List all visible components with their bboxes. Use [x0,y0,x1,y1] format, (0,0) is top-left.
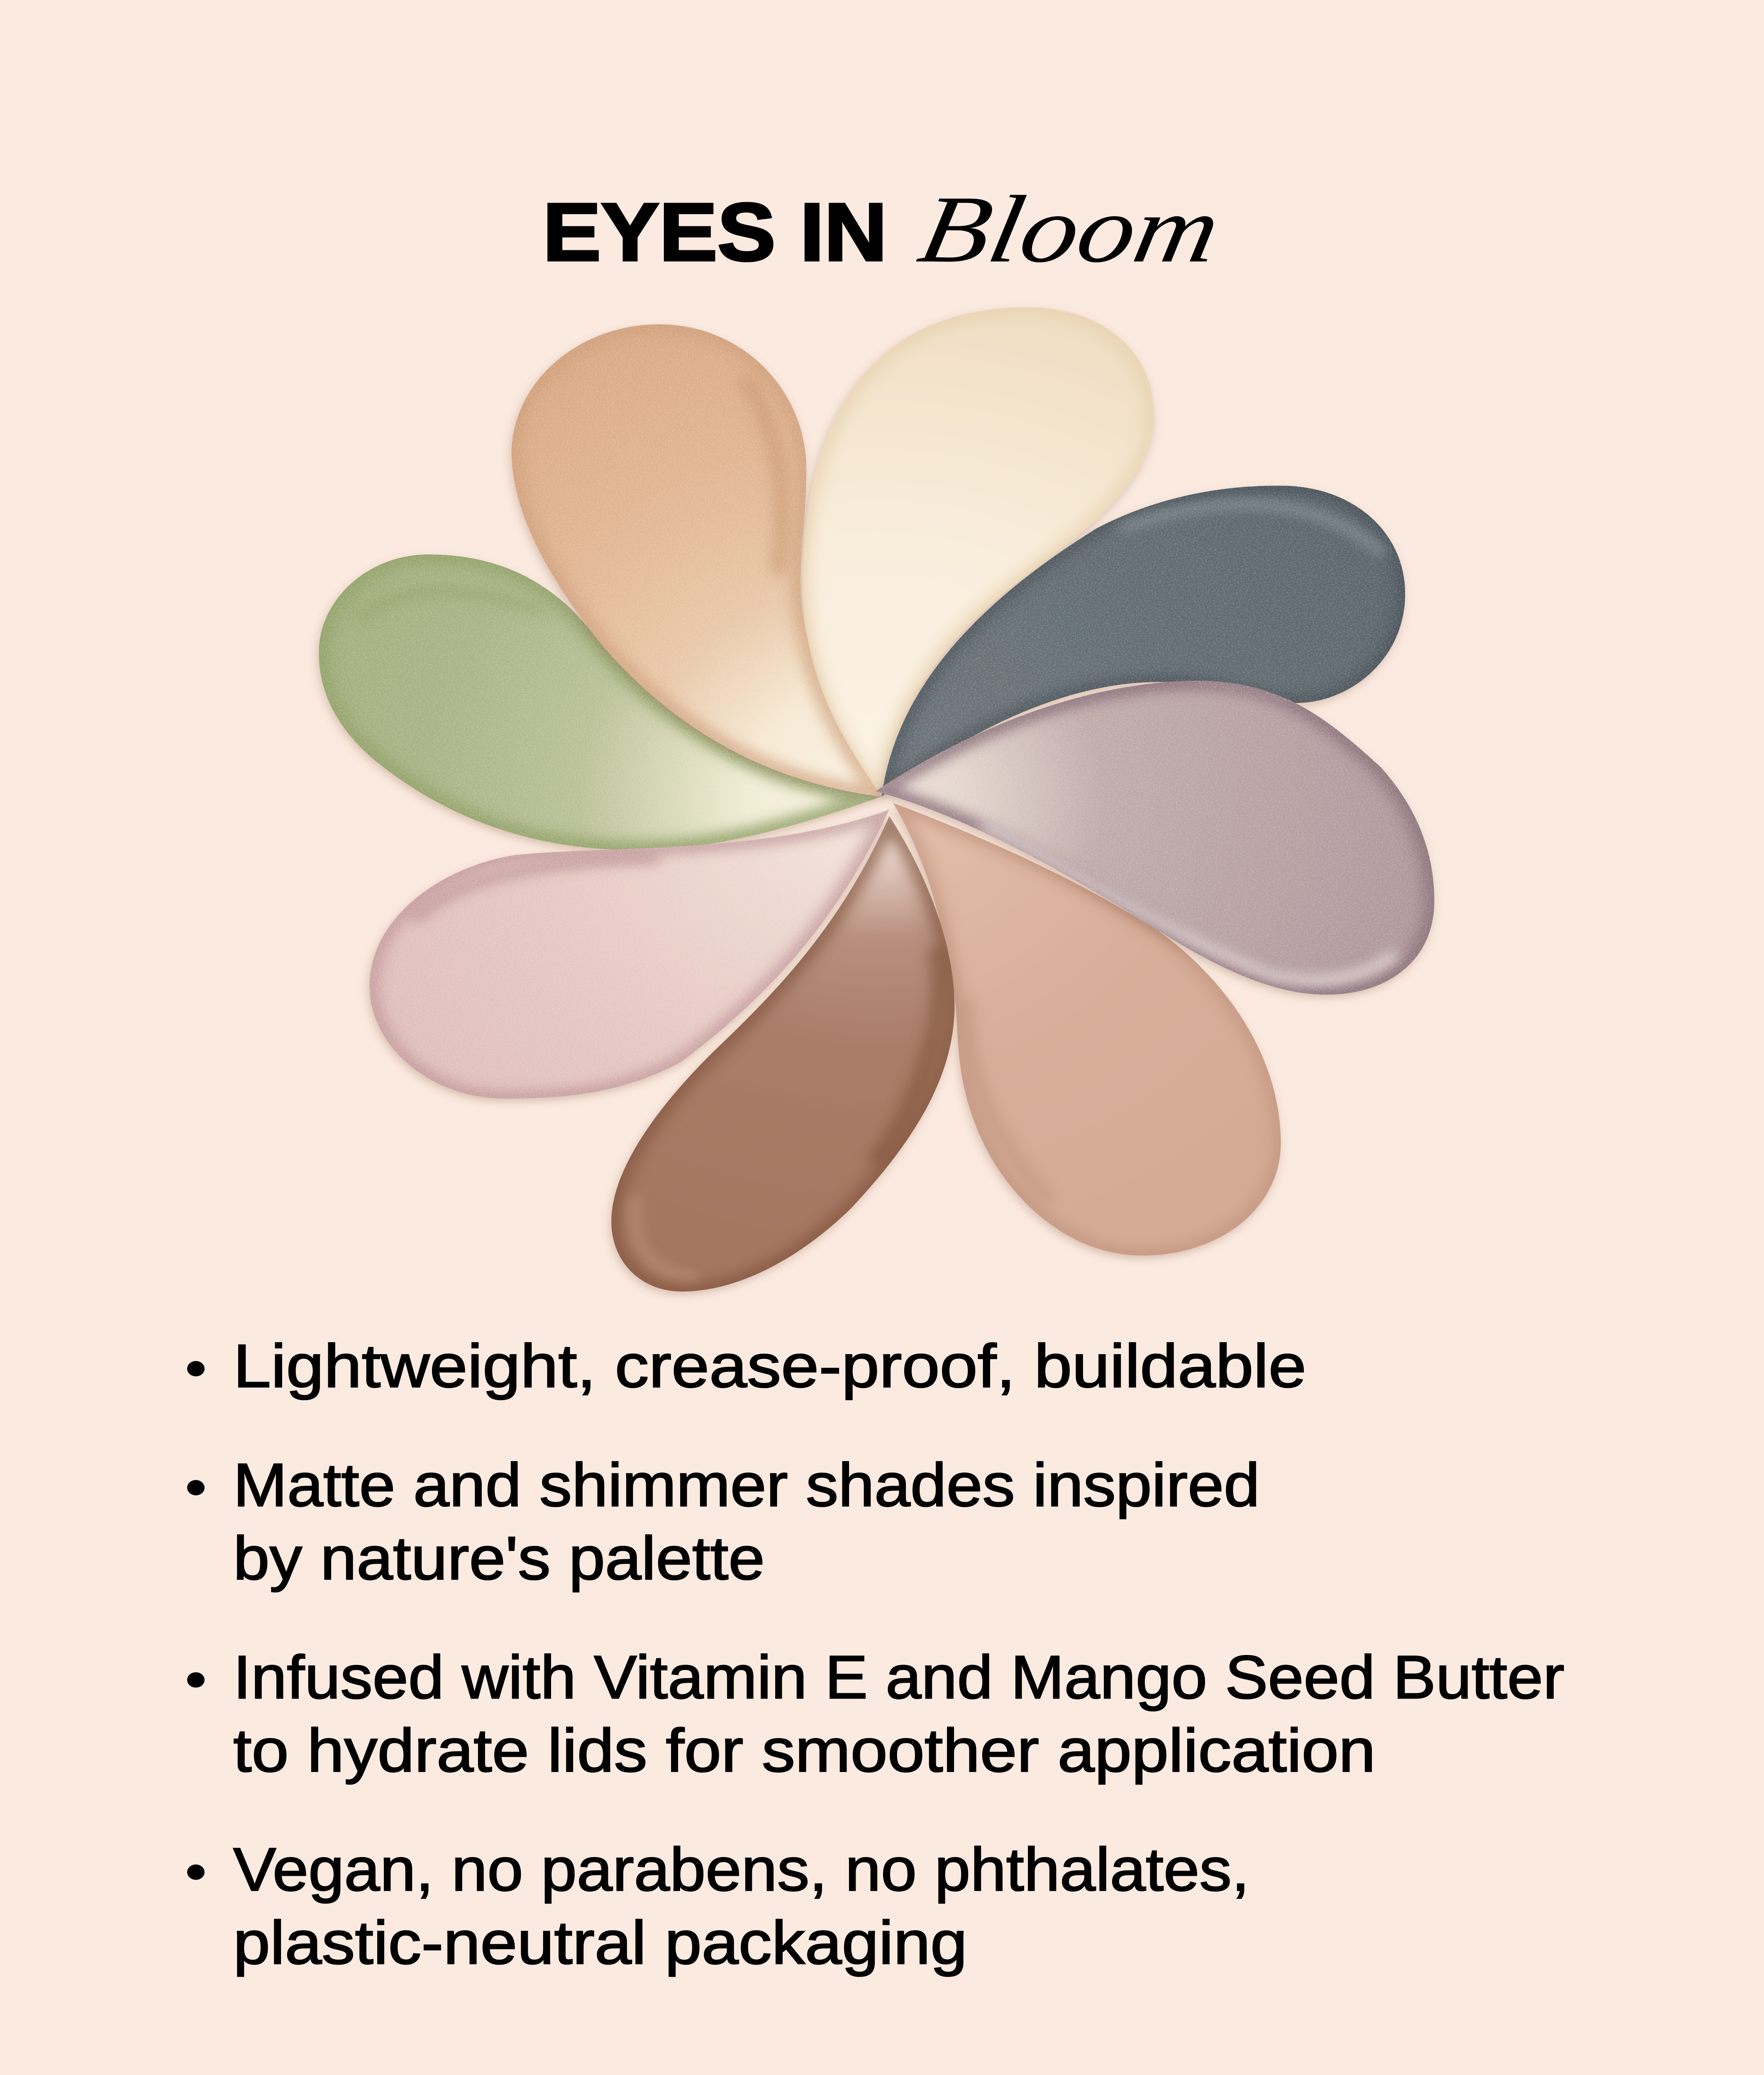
title: eyes in: EYES IN [543,186,887,278]
swatch: mauve [876,681,1434,995]
swatch: slate [881,486,1405,796]
infographic page [187,195,1564,1977]
swatch: brown [611,816,954,1291]
swatch: pink [370,810,889,1099]
bullet: vegan [187,1835,1249,1977]
bullet: matte and shimmer: by nature's palette [233,1524,765,1592]
flower of eyeshadow swatches [290,293,1488,1313]
bullet: vegan: plastic-neutral packaging [233,1909,967,1977]
title [543,176,1229,282]
title: bloom script: Bloom [911,176,1229,282]
swatch: cream [803,308,1154,796]
bullet list [187,1332,1564,1977]
bullet: matte and shimmer [187,1451,1260,1592]
bullet: infused: to hydrate lids for smoother application [233,1716,1376,1784]
bullet: matte and shimmer: Matte and shimmer shades inspired [233,1451,1260,1519]
bullet: lightweight: Lightweight, crease-proof, buildable [233,1332,1306,1400]
bullet: vegan: Vegan, no parabens, no phthalates, [233,1835,1249,1904]
swatch: peach [512,324,881,796]
swatch: tan [893,803,1281,1255]
shimmer grain [290,293,1488,1313]
bullet: infused: Infused with Vitamin E and Mango Seed Butter [233,1643,1564,1711]
swatch: green [319,554,882,850]
bullet: infused [187,1643,1564,1784]
